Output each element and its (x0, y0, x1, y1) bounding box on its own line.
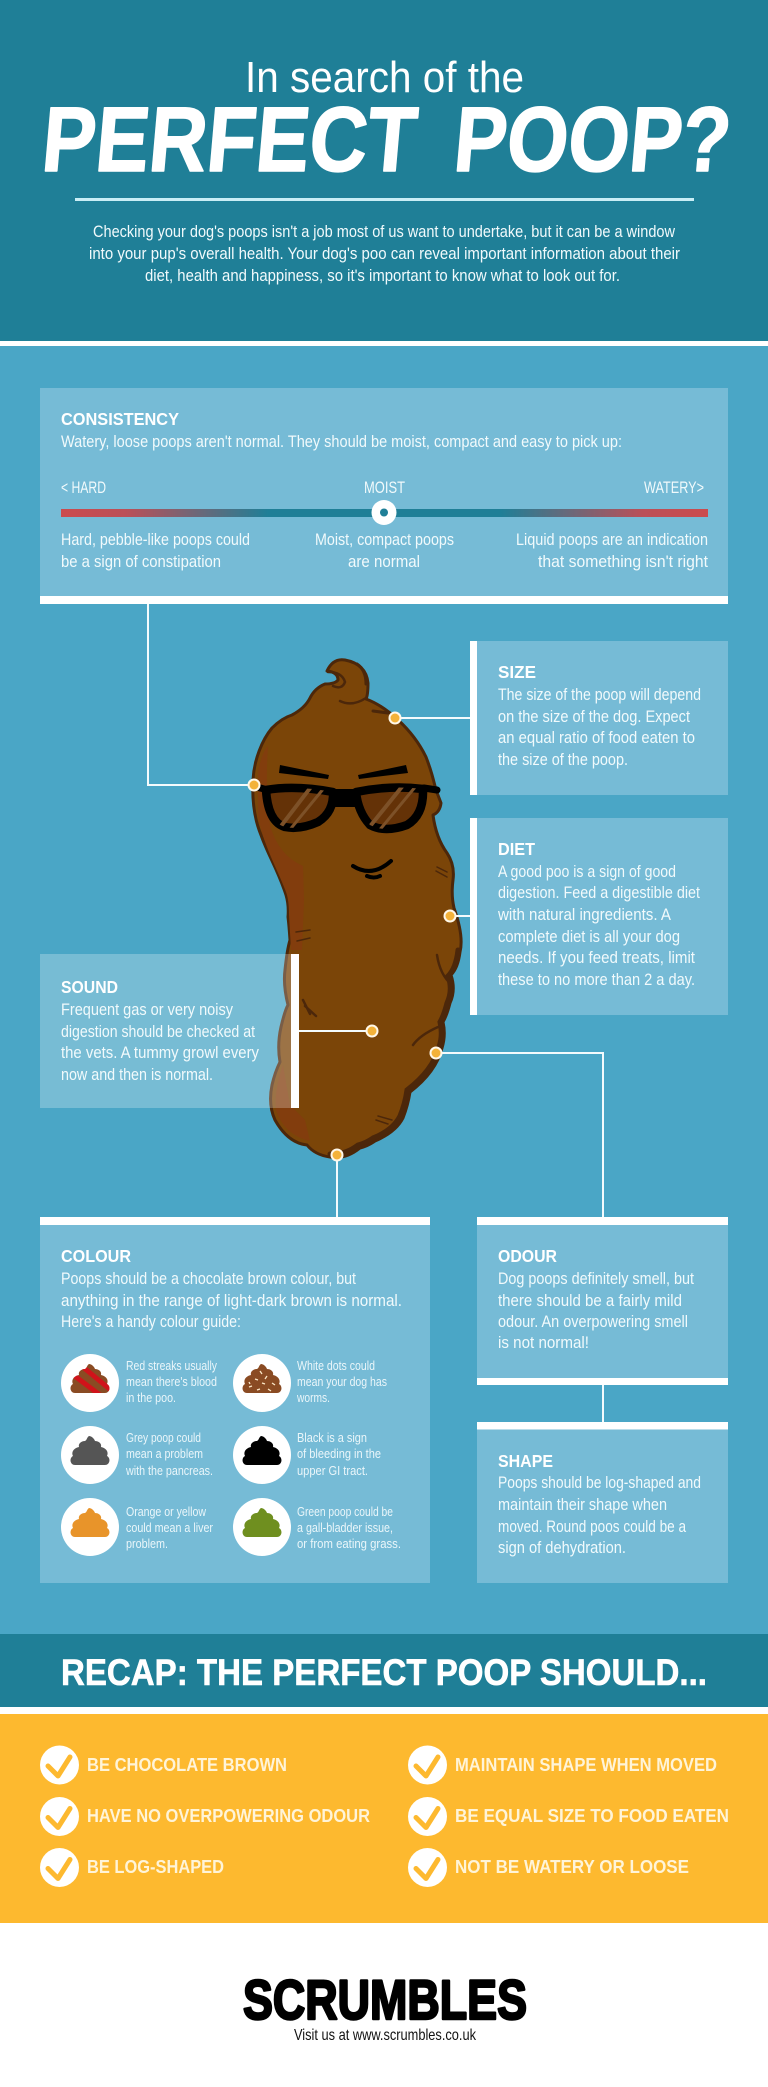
orange text: Orange or yellow (126, 1505, 207, 1519)
red streak text: mean there's blood (126, 1375, 217, 1389)
scale labels: WATERY> (644, 479, 704, 497)
green text: Green poop could be (297, 1505, 393, 1519)
header (0, 0, 768, 341)
main blue section (0, 346, 768, 1634)
poop character (253, 660, 461, 1158)
size text: on the size of the dog. Expect (498, 708, 690, 726)
scale descriptions: that something isn't right (538, 553, 708, 571)
poop body (253, 660, 461, 1158)
orange text: problem. (126, 1537, 168, 1551)
diet text: A good poo is a sign of good (498, 863, 676, 881)
panel: diet (470, 818, 728, 1015)
main title: PERFECT (38, 88, 421, 191)
connector: consistency to poop (148, 604, 254, 785)
grey text: mean a problem (126, 1447, 203, 1461)
recap banner (0, 1634, 768, 1707)
diet heading: DIET (498, 839, 535, 859)
sound heading: SOUND (61, 977, 118, 997)
grey text: with the pancreas. (125, 1464, 213, 1478)
body dark edge and creases (296, 664, 458, 1154)
consistency scale (61, 500, 708, 525)
size text (498, 686, 701, 769)
checklist text (87, 1755, 729, 1877)
panel: odour (477, 1217, 728, 1385)
black text: Black is a sign (297, 1431, 367, 1445)
recap heading: RECAP: THE PERFECT POOP SHOULD... (61, 1652, 707, 1693)
consistency heading: CONSISTENCY (61, 409, 179, 429)
size text: The size of the poop will depend (498, 686, 701, 704)
colour heading: COLOUR (61, 1246, 131, 1266)
recap checklist (0, 1714, 768, 1923)
green text (297, 1505, 401, 1551)
colour text: Poops should be a chocolate brown colour, but (61, 1270, 356, 1288)
size text: the size of the poop. (498, 751, 628, 769)
scale descriptions: Hard, pebble-like poops could (61, 531, 250, 549)
grey text: Grey poop could (126, 1431, 201, 1445)
intro text (89, 223, 680, 285)
shape text: moved. Round poos could be a (498, 1518, 687, 1536)
colour text (61, 1270, 402, 1331)
shape text: maintain their shape when (498, 1496, 667, 1514)
diet text: digestion. Feed a digestible diet (498, 884, 700, 902)
checklist text: BE LOG-SHAPED (87, 1857, 224, 1877)
odour text (498, 1270, 694, 1352)
intro text: Checking your dog's poops isn't a job most of us want to undertake, but it can be a window (93, 223, 675, 241)
diet text: needs. If you feed treats, limit (498, 949, 695, 967)
black text (297, 1431, 381, 1478)
eyebrows (279, 765, 408, 779)
scale descriptions: Moist, compact poops (315, 531, 454, 549)
mouth (353, 861, 391, 878)
checklist text: HAVE NO OVERPOWERING ODOUR (87, 1806, 370, 1826)
icon: orange poop (61, 1498, 119, 1556)
red streak text (126, 1359, 218, 1405)
colour text: anything in the range of light-dark brown is normal. (61, 1292, 402, 1310)
icon: grey poop (61, 1426, 119, 1484)
scale descriptions: are normal (348, 553, 420, 571)
diet text (497, 863, 700, 989)
red streak text: in the poo. (126, 1391, 176, 1405)
sound text (61, 1001, 260, 1084)
checklist text: BE CHOCOLATE BROWN (87, 1755, 287, 1775)
intro text: into your pup's overall health. Your dog's poo can reveal important information about their (89, 245, 680, 263)
sound text: now and then is normal. (61, 1066, 213, 1084)
icon: red streak poop (61, 1354, 119, 1412)
checklist text: NOT BE WATERY OR LOOSE (455, 1857, 689, 1877)
title line one: In search of the (245, 53, 524, 102)
panel: size (470, 641, 728, 795)
white dots text: worms. (296, 1391, 330, 1405)
white dots text: mean your dog has (297, 1375, 387, 1389)
sound text: Frequent gas or very noisy (61, 1001, 234, 1019)
shape text: Poops should be log-shaped and (498, 1474, 701, 1492)
shape heading: SHAPE (498, 1451, 553, 1471)
scale labels: MOIST (364, 479, 405, 497)
green text: or from eating grass. (297, 1537, 401, 1551)
odour text: is not normal! (498, 1334, 589, 1352)
size heading: SIZE (498, 662, 536, 682)
scale descriptions: be a sign of constipation (61, 553, 221, 571)
footer link: Visit us at www.scrumbles.co.uk (294, 2027, 477, 2044)
panel: shape (477, 1422, 728, 1583)
diet text: complete diet is all your dog (498, 928, 680, 946)
icon: black poop (233, 1426, 291, 1484)
panel: consistency (40, 388, 728, 604)
icons: check marks right (408, 1746, 447, 1887)
white dots text: White dots could (297, 1359, 375, 1373)
checklist text: MAINTAIN SHAPE WHEN MOVED (455, 1755, 717, 1775)
footer logo: SCRUMBLES (243, 1968, 527, 2031)
shape text: sign of dehydration. (498, 1539, 626, 1557)
icon: green poop (233, 1498, 291, 1556)
checklist text: BE EQUAL SIZE TO FOOD EATEN (455, 1806, 729, 1826)
sunglasses (253, 783, 437, 832)
grey text (125, 1431, 213, 1478)
sound text: the vets. A tummy growl every (61, 1044, 260, 1062)
black text: of bleeding in the (297, 1447, 381, 1461)
panel: sound (40, 954, 299, 1108)
shape text (498, 1474, 701, 1557)
odour text: there should be a fairly mild (498, 1292, 682, 1310)
orange text: could mean a liver (126, 1521, 213, 1535)
black text: upper GI tract. (297, 1464, 368, 1478)
diet text: with natural ingredients. A (497, 906, 671, 924)
odour text: odour. An overpowering smell (498, 1313, 688, 1331)
scale labels (61, 479, 704, 497)
size text: an equal ratio of food eaten to (498, 729, 695, 747)
diet text: these to no more than 2 a day. (498, 971, 695, 989)
icon: white dots poop (233, 1354, 291, 1412)
scale labels: < HARD (61, 479, 106, 497)
white dots text (296, 1359, 387, 1405)
odour text: Dog poops definitely smell, but (498, 1270, 694, 1288)
consistency description: Watery, loose poops aren't normal. They should be moist, compact and easy to pick up: (61, 433, 622, 451)
icons: check marks left (40, 1746, 79, 1887)
panel: colour (40, 1217, 430, 1583)
colour text: Here's a handy colour guide: (61, 1313, 241, 1331)
body shading (258, 746, 304, 950)
connector: odour to shape (602, 1385, 604, 1422)
odour heading: ODOUR (498, 1246, 557, 1266)
main title (38, 88, 735, 191)
scale descriptions: Liquid poops are an indication (516, 531, 708, 549)
red streak text: Red streaks usually (126, 1359, 218, 1373)
sound text: digestion should be checked at (61, 1023, 255, 1041)
intro text: diet, health and happiness, so it's important to know what to look out for. (145, 267, 620, 285)
marker dots (248, 712, 456, 1162)
orange text (126, 1505, 213, 1551)
green text: a gall-bladder issue, (297, 1521, 393, 1535)
scale descriptions (61, 531, 708, 571)
connectors to poop (299, 718, 603, 1217)
